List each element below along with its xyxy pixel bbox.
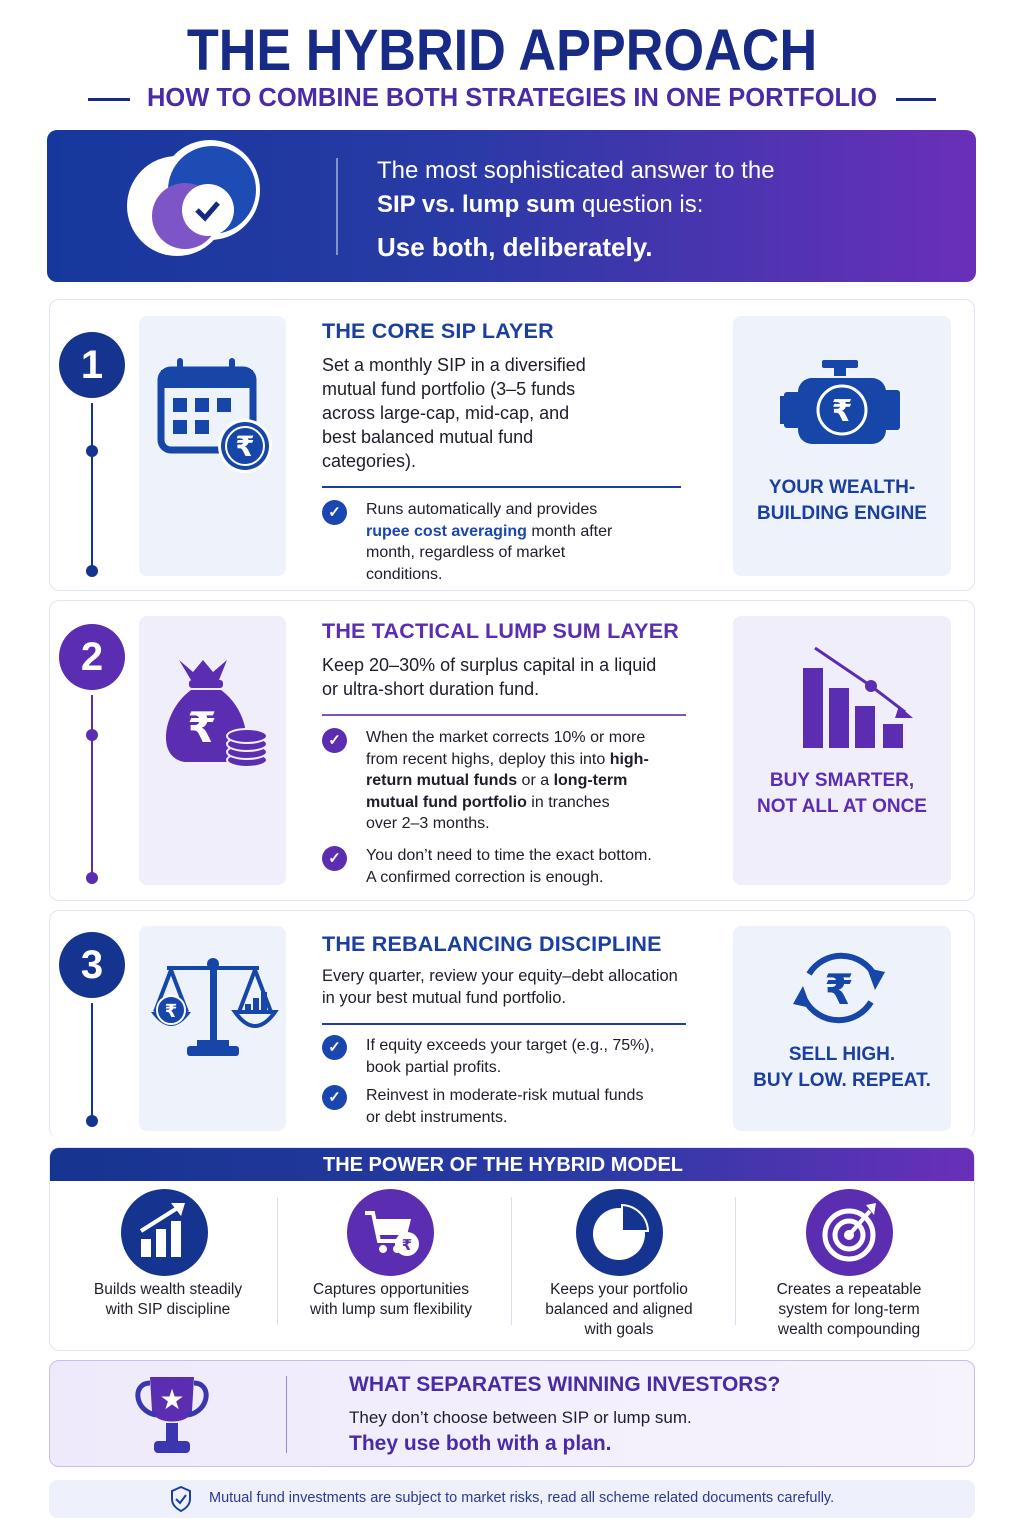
right text 2: NOT ALL AT ONCE — [757, 796, 927, 817]
text 2 — [322, 655, 656, 699]
bullets 3: If equity exceeds your target (e.g., 75%), — [366, 1037, 654, 1054]
right box: engine: ₹ — [832, 394, 852, 429]
icon box: money bag — [139, 616, 286, 885]
bullets 2: over 2–3 months. — [366, 815, 490, 832]
subtitle: HOW TO COMBINE BOTH STRATEGIES IN ONE PORTFOLIO — [147, 84, 877, 112]
panel: power of hybrid model — [49, 1147, 975, 1351]
text 1: categories). — [322, 451, 416, 471]
footer disclaimer — [49, 1480, 975, 1518]
bullet 1: conditions. — [366, 566, 442, 582]
icon box: money bag: ₹ — [187, 703, 217, 752]
text 2: or ultra-short duration fund. — [322, 679, 539, 699]
right text 1 — [757, 477, 927, 524]
panel 2 — [49, 600, 975, 901]
icon: overlapping circles — [127, 140, 260, 256]
text 1 — [322, 355, 586, 471]
text: wealth compounding — [778, 1321, 920, 1338]
bullet 1: ✓ — [328, 504, 341, 521]
text: balanced and aligned — [545, 1301, 693, 1318]
icon: cart — [347, 1189, 434, 1276]
bullets 3: ✓ — [328, 1089, 341, 1106]
text: with goals — [585, 1321, 653, 1338]
bullet 1 — [322, 500, 612, 582]
column texts — [94, 1281, 242, 1318]
callout: winning investors: They use both with a plan. — [349, 1432, 612, 1455]
bullets 2: from recent highs, deploy this into high- — [366, 750, 649, 768]
text: Captures opportunities — [313, 1281, 469, 1298]
bullets 3: or debt instruments. — [366, 1108, 507, 1126]
right box: cycle rupee: ₹ — [824, 965, 854, 1014]
heading 1: THE CORE SIP LAYER — [322, 319, 554, 343]
text 1: Set a monthly SIP in a diversified — [322, 355, 586, 375]
icon: trophy: ★ — [159, 1383, 185, 1416]
text 2: Keep 20–30% of surplus capital in a liquid — [322, 655, 656, 675]
bullets 3 — [322, 1035, 654, 1126]
panel 3 — [49, 910, 975, 1138]
icon: trophy — [135, 1377, 209, 1453]
bullets 2: return mutual funds or a long-term — [366, 772, 627, 789]
right box: engine — [733, 316, 951, 576]
bullets 2: ✓ — [328, 850, 341, 867]
icon: pie chart — [576, 1189, 663, 1276]
bullets 2: You don’t need to time the exact bottom. — [366, 847, 652, 864]
right text 1: YOUR WEALTH- — [769, 477, 915, 498]
footer disclaimer: Mutual fund investments are subject to market risks, read all scheme related documents carefully. — [209, 1490, 834, 1506]
right box: bar chart down — [733, 616, 951, 885]
bullets 3: book partial profits. — [366, 1058, 501, 1076]
banner text — [377, 157, 775, 262]
icon: target — [806, 1189, 893, 1276]
text: Creates a repeatable — [777, 1281, 921, 1298]
bullet 1: Runs automatically and provides — [366, 501, 597, 518]
icon: cart: ₹ — [402, 1236, 412, 1254]
column texts: with SIP discipline — [106, 1301, 230, 1318]
header bar — [50, 1148, 976, 1181]
bullet 1: rupee cost averaging month after — [366, 522, 612, 540]
header bar: THE POWER OF THE HYBRID MODEL — [323, 1154, 683, 1176]
callout: winning investors — [49, 1360, 975, 1467]
heading 3: THE REBALANCING DISCIPLINE — [322, 932, 662, 956]
text: Keeps your portfolio — [550, 1281, 688, 1298]
banner text: Use both, deliberately. — [377, 232, 652, 262]
right text 1: BUILDING ENGINE — [757, 503, 927, 524]
text: with lump sum flexibility — [310, 1301, 472, 1318]
banner text: SIP vs. lump sum question is: — [377, 191, 703, 218]
text 1: across large-cap, mid-cap, and — [322, 403, 569, 423]
right text 3 — [753, 1044, 931, 1091]
bullets 3: ✓ — [328, 1039, 341, 1056]
icon box: scale: ₹ — [165, 1001, 177, 1022]
icon box: calendar: ₹ — [235, 430, 255, 463]
banner text: The most sophisticated answer to the — [377, 157, 775, 184]
right text 3: BUY LOW. REPEAT. — [753, 1070, 931, 1091]
text: system for long-term — [778, 1301, 920, 1318]
right box: cycle rupee — [733, 926, 951, 1131]
icon: growth chart — [121, 1189, 208, 1276]
bullet 1: month, regardless of market — [366, 544, 565, 561]
text 3 — [322, 967, 678, 1007]
text 1: mutual fund portfolio (3–5 funds — [322, 379, 575, 399]
panel 1 — [49, 299, 975, 591]
text: 1 — [81, 343, 103, 387]
title: THE HYBRID APPROACH — [187, 18, 817, 83]
callout: winning investors: They don’t choose between SIP or lump sum. — [349, 1408, 692, 1427]
right text 3: SELL HIGH. — [789, 1044, 895, 1065]
column texts: Builds wealth steadily — [94, 1281, 242, 1298]
heading 2: THE TACTICAL LUMP SUM LAYER — [322, 619, 679, 643]
right text 2: BUY SMARTER, — [770, 770, 914, 791]
bullets 2 — [322, 728, 652, 886]
text 3: in your best mutual fund portfolio. — [322, 989, 566, 1007]
bullets 2: ✓ — [328, 732, 341, 749]
icon box: calendar — [139, 316, 286, 576]
bullets 3: Reinvest in moderate-risk mutual funds — [366, 1087, 643, 1104]
callout: winning investors: WHAT SEPARATES WINNING INVESTORS? — [349, 1373, 780, 1396]
right text 2 — [757, 770, 927, 817]
bullets 2: A confirmed correction is enough. — [366, 868, 603, 886]
banner — [47, 130, 976, 282]
text 1: best balanced mutual fund — [322, 427, 533, 447]
text: 2 — [81, 635, 103, 679]
icon box: scale — [139, 926, 286, 1131]
bullets 2: mutual fund portfolio in tranches — [366, 794, 610, 810]
text: 3 — [81, 943, 103, 987]
bullets 2: When the market corrects 10% or more — [366, 729, 645, 746]
text 3: Every quarter, review your equity–debt allocation — [322, 967, 678, 985]
